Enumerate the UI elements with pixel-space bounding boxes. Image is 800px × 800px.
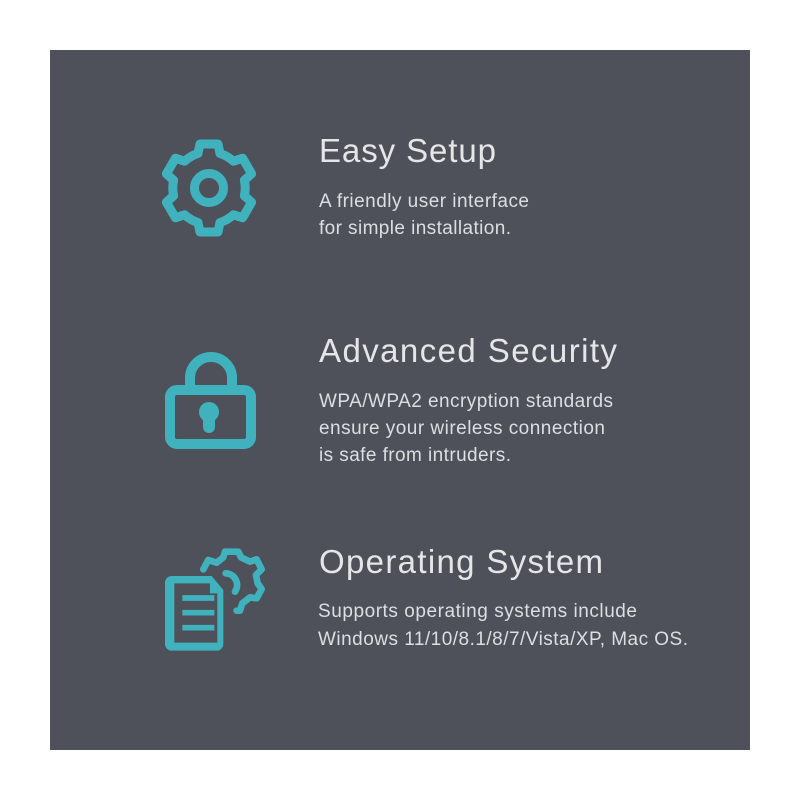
- heading: Advanced Security: Advanced Security: [319, 332, 618, 369]
- text: Easy Setup description: for simple installation.: [319, 218, 511, 239]
- icon: document with gear: [165, 552, 262, 651]
- heading: Operating System: Operating System: [319, 543, 603, 580]
- text: Operating System description: Windows 11/10/8.1/8/7/Vista/XP, Mac OS.: [318, 629, 688, 650]
- heading: Easy Setup: Easy Setup: [319, 132, 496, 169]
- text: Advanced Security description: WPA/WPA2 encryption standards: [319, 391, 613, 412]
- text: Easy Setup description: [319, 191, 529, 239]
- text: Advanced Security description: ensure your wireless connection: [319, 418, 605, 439]
- text: Operating System description: Supports operating systems include: [318, 601, 637, 622]
- text: Advanced Security description: [319, 391, 613, 466]
- icon: gear: [166, 144, 252, 232]
- icon: padlock: [170, 357, 251, 444]
- text: Advanced Security description: is safe from intruders.: [319, 445, 511, 466]
- text: Easy Setup description: A friendly user interface: [319, 191, 529, 212]
- panel: dark background: [50, 50, 750, 750]
- text: Operating System description: [318, 601, 688, 650]
